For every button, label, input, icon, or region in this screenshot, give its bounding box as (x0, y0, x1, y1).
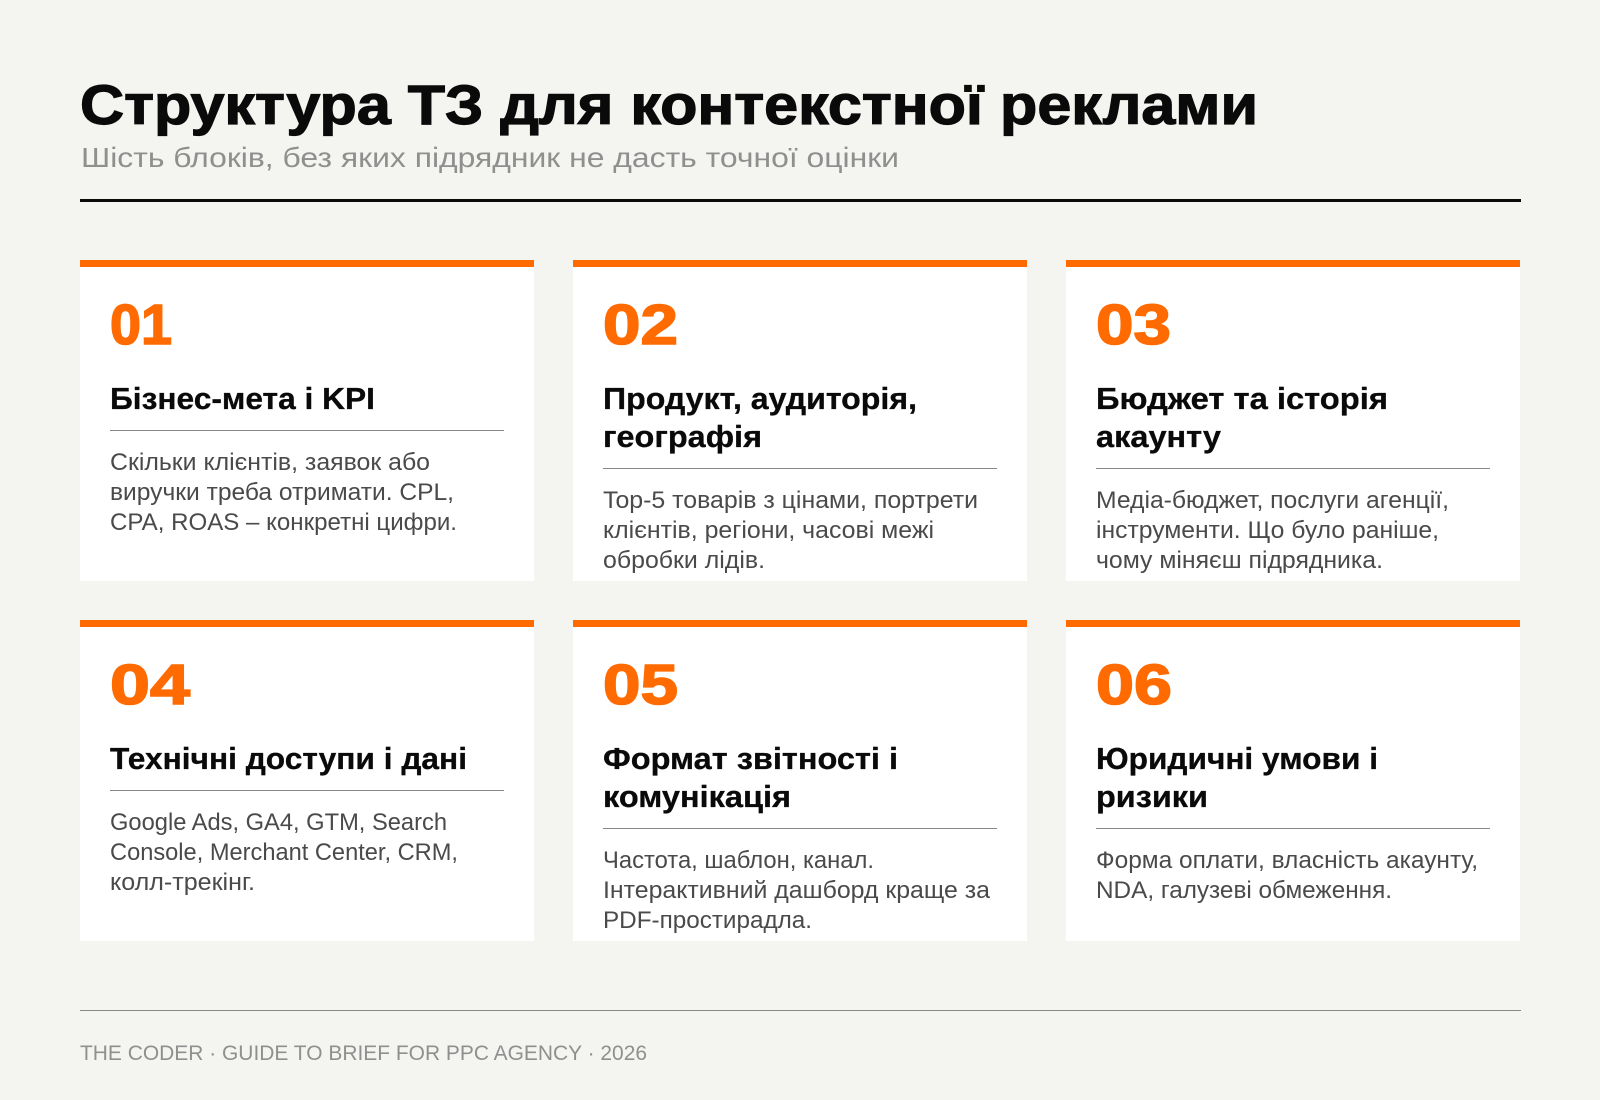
text block: card 03 (1096, 487, 1449, 574)
text block: card 02: Top-5 товарів з цінами, портрети (603, 487, 978, 514)
text block: card 05: Інтерактивний дашборд краще за (603, 877, 991, 904)
text block: card 05: Частота, шаблон, канал. (603, 847, 874, 874)
text block: card 01 (110, 449, 457, 536)
subtitle: Шість блоків, без яких підрядник не дасть точної оцінки (81, 142, 899, 173)
heading: card 04: Технічні доступи і дані (110, 741, 467, 776)
text block: card 02: клієнтів, регіони, часові межі (603, 517, 934, 544)
heading: card 06: ризики (1096, 779, 1208, 814)
text block: card 02 (603, 487, 978, 574)
text block: card 03: чому міняєш підрядника. (1096, 547, 1383, 574)
panel: card 01 (80, 260, 534, 581)
text block: card 03: інструменти. Що було раніше, (1096, 517, 1439, 544)
text block: card 01: Скільки клієнтів, заявок або (110, 449, 430, 476)
text block: card 04: колл-трекінг. (110, 869, 255, 896)
panel: card 03 (1066, 260, 1520, 581)
heading: card 02 (603, 381, 917, 454)
number 05: 05 (603, 653, 678, 717)
text block: card 02: обробки лідів. (603, 547, 765, 574)
heading: card 02: Продукт, аудиторія, (603, 381, 917, 416)
heading: card 05: Формат звітності і (603, 741, 898, 776)
heading: card 03 (1096, 381, 1388, 454)
number 06: 06 (1096, 653, 1172, 717)
footer: THE CODER · GUIDE TO BRIEF FOR PPC AGENCY · 2026 (80, 1042, 647, 1065)
heading: card 01: Бізнес-мета і KPI (110, 381, 375, 416)
heading: card 05 (603, 741, 898, 814)
number 04: 04 (110, 653, 190, 717)
text block: card 04: Console, Merchant Center, CRM, (110, 839, 458, 866)
text block: card 06 (1096, 847, 1478, 904)
title: Структура ТЗ для контекстної реклами (80, 73, 1258, 136)
text block: card 06: NDA, галузеві обмеження. (1096, 877, 1392, 904)
number 03: 03 (1096, 293, 1171, 357)
heading: card 03: Бюджет та історія (1096, 381, 1388, 416)
text block: card 06: Форма оплати, власність акаунту, (1096, 847, 1478, 874)
heading: card 06: Юридичні умови і (1096, 741, 1378, 776)
text block: card 04: Google Ads, GA4, GTM, Search (110, 809, 447, 836)
heading: card 03: акаунту (1096, 419, 1222, 454)
text block: card 03: Медіа-бюджет, послуги агенції, (1096, 487, 1449, 514)
number 02: 02 (603, 293, 678, 357)
heading: card 02: географія (603, 419, 762, 454)
text block: card 05 (603, 847, 991, 934)
panel: card 06 (1066, 620, 1520, 941)
heading: card 06 (1096, 741, 1378, 814)
text block: card 01: виручки треба отримати. CPL, (110, 479, 454, 506)
panel: card 04 (80, 620, 534, 941)
text block: card 04 (110, 809, 458, 896)
heading: card 05: комунікація (603, 779, 791, 814)
number 01: 01 (110, 293, 172, 357)
text block: card 05: PDF-простирадла. (603, 907, 812, 934)
text block: card 01: CPA, ROAS – конкретні цифри. (110, 509, 457, 536)
panel: card 02 (573, 260, 1027, 581)
panel: card 05 (573, 620, 1027, 941)
